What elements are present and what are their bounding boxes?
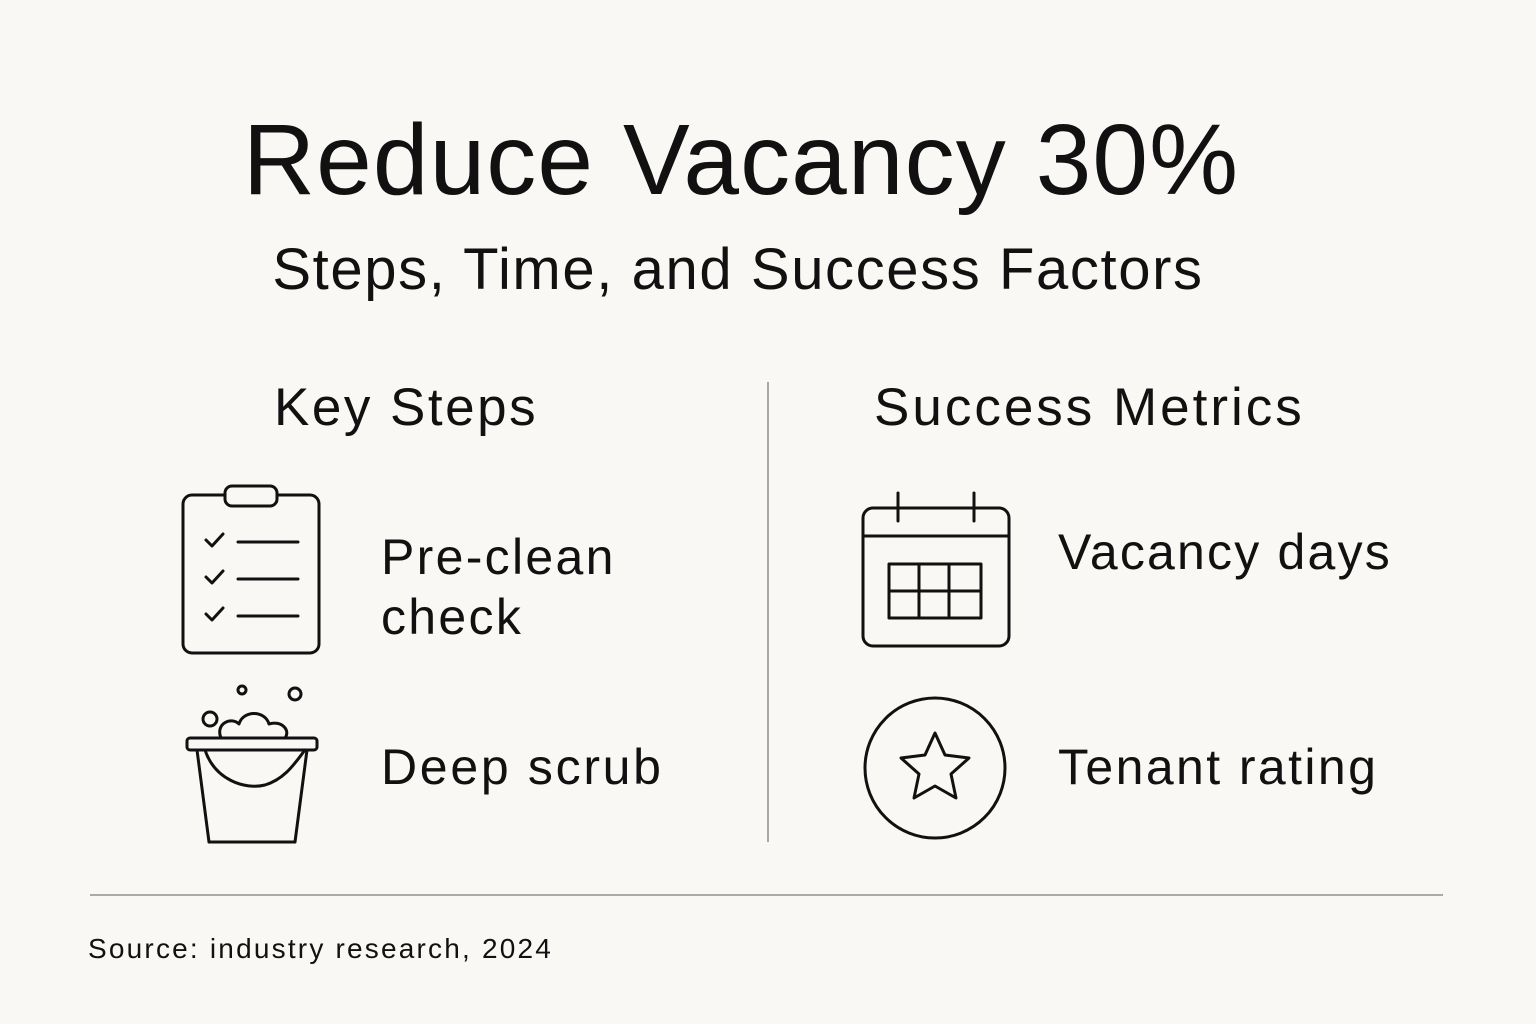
divider: horizontal — [90, 894, 1443, 896]
icon: calendar — [862, 492, 1010, 648]
text: pre-clean check: Pre-clean — [381, 529, 616, 585]
text: pre-clean check — [381, 529, 616, 645]
icon: star in circle — [864, 696, 1006, 840]
icon: clipboard checklist — [182, 484, 320, 654]
divider: vertical — [767, 382, 769, 842]
text: pre-clean check: check — [381, 589, 523, 645]
text: vacancy days: Vacancy days — [1058, 524, 1392, 580]
text: tenant rating: Tenant rating — [1058, 739, 1378, 795]
source note: Source: industry research, 2024 — [88, 933, 553, 964]
heading: key steps: Key Steps — [274, 378, 538, 437]
panel: key steps — [182, 378, 664, 844]
text: deep scrub: Deep scrub — [381, 739, 664, 795]
title: Reduce Vacancy 30% — [243, 104, 1239, 216]
heading: success metrics: Success Metrics — [874, 378, 1305, 437]
subtitle: Steps, Time, and Success Factors — [272, 237, 1204, 302]
panel: success metrics — [862, 378, 1392, 840]
icon: bucket with suds — [186, 684, 318, 844]
